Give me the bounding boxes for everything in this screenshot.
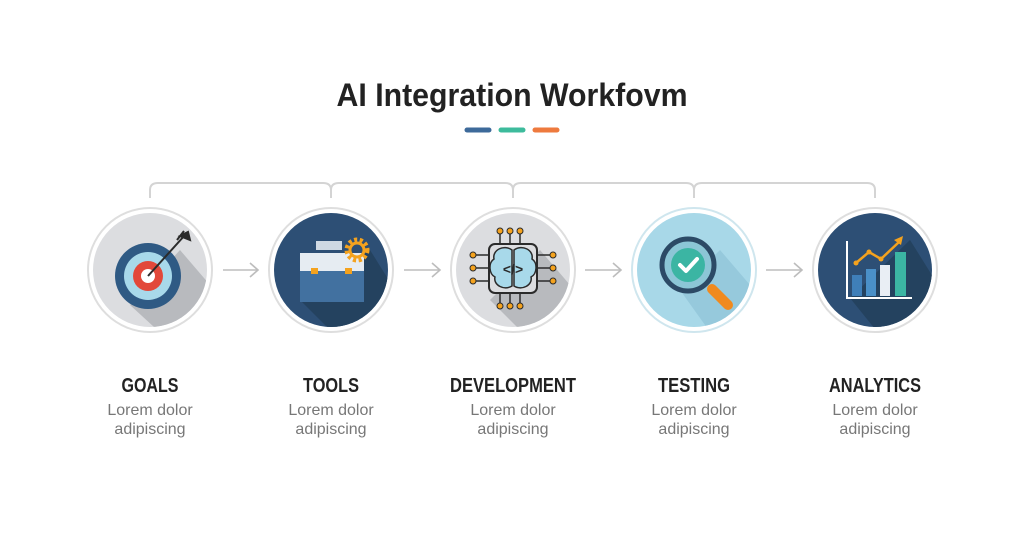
icon: brain chip	[470, 228, 556, 309]
icon: brain chip: </>	[503, 261, 523, 277]
label: testing: Lorem dolor	[651, 402, 737, 419]
label: goals	[107, 375, 193, 438]
label: analytics: ANALYTICS	[829, 375, 921, 397]
label: analytics	[829, 375, 921, 438]
labels	[107, 375, 921, 438]
label: tools: Lorem dolor	[288, 402, 374, 419]
arrows	[223, 263, 802, 277]
step: testing	[631, 207, 757, 333]
label: analytics: Lorem dolor	[832, 402, 918, 419]
step: development	[450, 207, 576, 333]
label: testing: adipiscing	[658, 421, 730, 438]
label: tools: TOOLS	[303, 375, 359, 397]
title: AI Integration Workfovm	[336, 77, 688, 113]
icon: bar chart	[847, 236, 912, 298]
icon: target	[115, 231, 190, 309]
label: goals: adipiscing	[114, 421, 186, 438]
label: development: adipiscing	[477, 421, 549, 438]
icon: toolbox with gear	[300, 240, 367, 302]
step: tools	[268, 207, 394, 333]
label: goals: Lorem dolor	[107, 402, 193, 419]
label: tools: adipiscing	[295, 421, 367, 438]
step: goals	[87, 207, 213, 333]
label: goals: GOALS	[122, 375, 178, 397]
title underline dashes	[467, 128, 557, 132]
label: analytics: adipiscing	[839, 421, 911, 438]
bracket connector	[150, 183, 875, 198]
label: development: DEVELOPMENT	[450, 375, 576, 397]
label: tools	[288, 375, 374, 438]
step: analytics	[812, 207, 938, 333]
label: development: Lorem dolor	[470, 402, 556, 419]
icon: magnifier check	[662, 239, 728, 305]
label: testing: TESTING	[658, 375, 730, 397]
label: development	[450, 375, 576, 438]
label: testing	[651, 375, 737, 438]
